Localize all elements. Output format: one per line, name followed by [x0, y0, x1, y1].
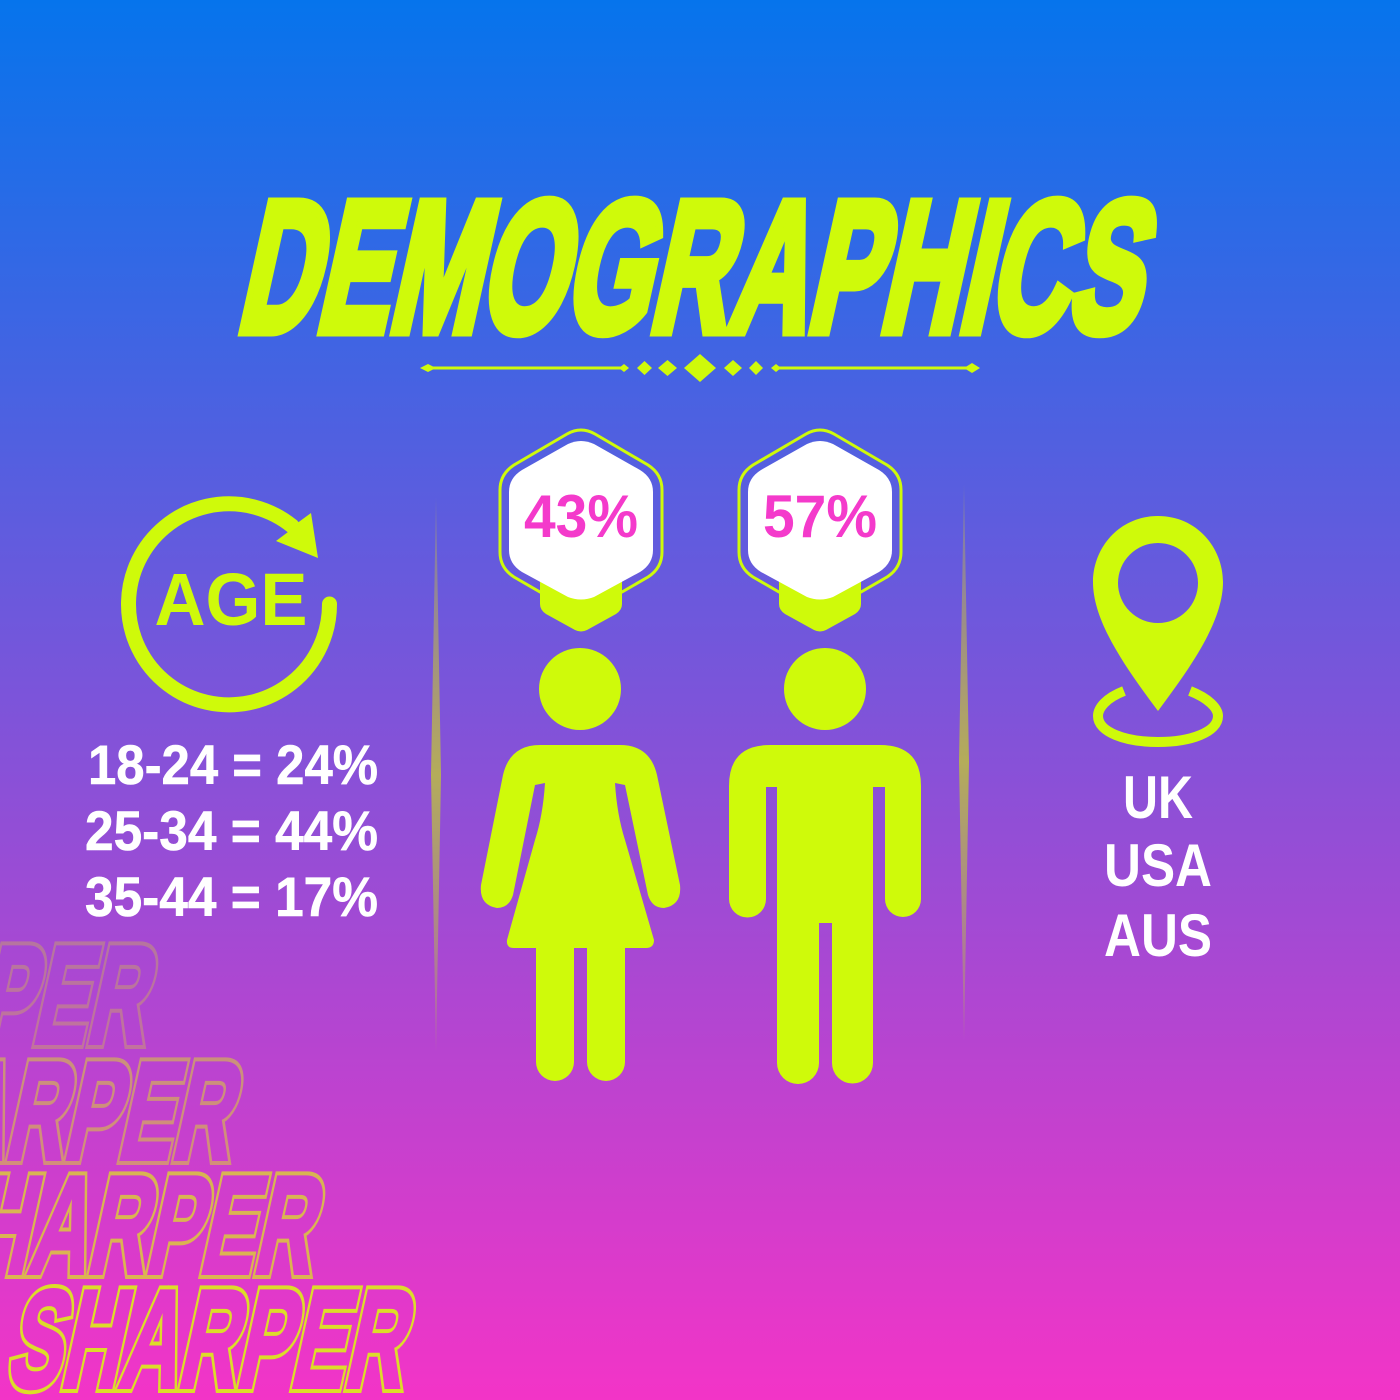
badge: 57%: [739, 430, 901, 632]
icon: ring arrowhead: [276, 513, 318, 558]
age breakdown text: 35-44 = 17%: [85, 865, 378, 928]
right vertical divider: [959, 484, 969, 1040]
badge: 43%: 43%: [524, 483, 638, 550]
locations list: AUS: [1104, 902, 1212, 969]
badge: 57%: 57%: [763, 483, 877, 550]
title divider ornament: [420, 354, 980, 382]
decorative repeated SHARPER wordmark: [0, 918, 505, 1400]
icon: woman figure: [481, 648, 680, 1081]
SHARPER line 3: [0, 1148, 338, 1303]
locations list: USA: [1104, 832, 1212, 899]
locations list: UK: [1123, 764, 1193, 831]
locations list: [1104, 764, 1212, 969]
SHARPER line 4: [0, 1262, 428, 1400]
badge: 43%: [500, 430, 662, 632]
SHARPER line 1: [0, 918, 171, 1073]
icon: location pin: [1093, 516, 1223, 742]
age breakdown text: [85, 733, 378, 928]
age breakdown text: 18-24 = 24%: [88, 733, 378, 796]
icon: age cycle ring: [129, 504, 330, 705]
age breakdown text: 25-34 = 44%: [85, 799, 378, 862]
icon: man figure: [729, 648, 921, 1084]
age label: AGE: [154, 558, 308, 641]
SHARPER line 2: [0, 1034, 256, 1189]
left vertical divider: [431, 498, 441, 1052]
